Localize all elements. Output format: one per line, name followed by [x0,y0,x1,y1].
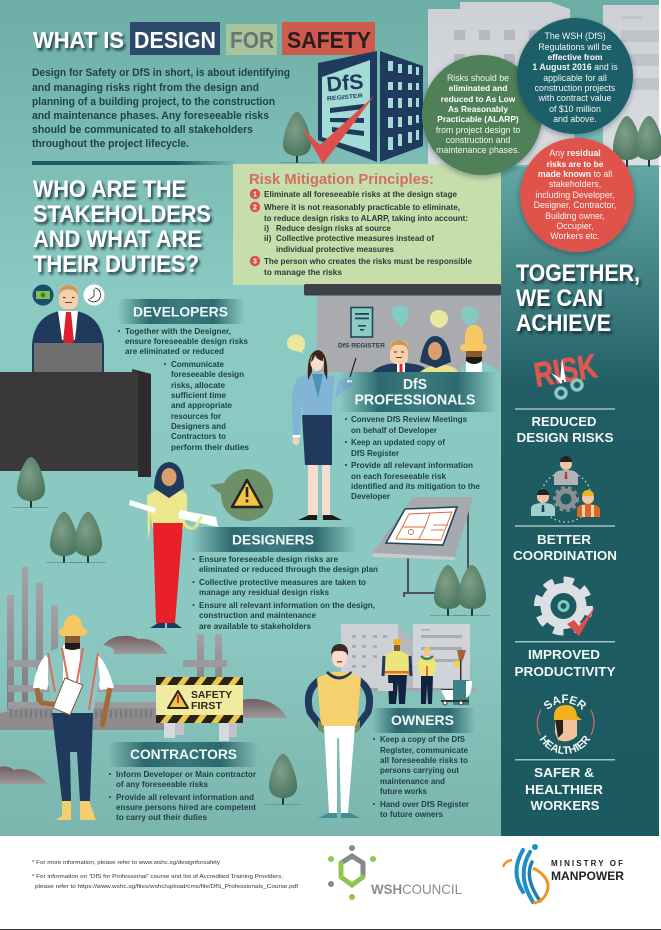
callout: teal circle: The WSH (DfS) [544,31,606,41]
text: contractor duties: Provide all relevant information and [116,792,254,802]
panel: risk mitigation principles: Reduce design risks at source [276,223,391,233]
text: designer duties: are available to stakeholders [199,621,311,631]
logo: Ministry of Manpower [503,844,624,903]
callout: green circle: maintenance phases. [436,145,520,155]
callout: green circle: As Reasonably [448,104,508,114]
heading: who are the stakeholders: STAKEHOLDERS [33,201,211,228]
footer notes: please refer to https://www.wshc.sg/files/wshc/upload/cms/file/DfS_Professionals_Course.pdf [35,884,298,890]
text: professional duties: Convene DfS Review Meetings [351,414,467,424]
cart [441,650,472,705]
text: developer duties: resources for [171,411,222,421]
trees top right [609,116,661,167]
label: improved productivity: PRODUCTIVITY [514,664,616,679]
callout: green circle: Risks should be [447,73,509,83]
text: owner duties: future works [380,786,427,796]
callout: red circle: Designer, Contractor, [534,200,616,210]
text: designer duties: Ensure foreseeable design risks are [199,554,338,564]
text: contractor duties: to carry out their duties [116,812,207,822]
icon: DfS register building: REGISTER [327,93,364,103]
speech bubble [287,334,305,353]
panel: risk mitigation principles [233,164,501,285]
intro paragraph: planning of a building project, to the construction [32,96,275,108]
label: safer healthier workers: HEALTHIER [525,782,604,797]
text: professional duties: Provide all relevant information [351,460,473,470]
label: better coordination: BETTER [537,532,592,547]
heading: dfs professionals [340,372,497,412]
column: together we can achieve [501,167,659,836]
label: better coordination [513,526,617,563]
text: developer duties [118,326,249,452]
icon: red check mark [302,96,374,164]
panel: designers [190,527,378,631]
panel: risk mitigation principles: ii) [264,233,272,243]
icon: register document [351,308,372,337]
callout: red circle: made known to all [538,169,612,179]
text: owner duties: to future owners [380,809,443,819]
intro paragraph: and managing risks right from the design and [32,82,259,94]
icon: warning bubble [210,469,273,521]
label: safer healthier workers: SAFER & [534,765,594,780]
text: developer duties: risks, allocate [171,380,225,390]
label: improved productivity [514,641,616,679]
rolled blueprints [129,500,218,528]
panel: dfs professionals [340,372,497,501]
callout: red circle: Any residual [549,148,601,158]
callout: green circle [422,55,542,175]
background: construction site pipes [0,567,287,784]
panel: owners [372,708,475,819]
callout: teal circle: with contract value [538,93,612,103]
text: professional duties: on each foreseeable risk [351,471,446,481]
logo: Ministry of Manpower: MINISTRY OF [551,859,623,868]
callout: green circle: Practicable (ALARP) [437,114,519,124]
icon: risk scissors: RISK [532,347,600,395]
title [33,22,375,55]
title: SAFETY [287,27,371,53]
text: developer duties: ensure foreseeable design risks [125,336,248,346]
text: owner duties: all foreseeable risks to [380,755,468,765]
label: safer healthier workers [515,759,615,813]
callout: teal circle: of $10 million [549,104,601,114]
text: owner duties: Keep a copy of the DfS [380,734,465,744]
logo: WSH Council [328,845,462,900]
callout: teal circle [517,18,633,134]
callout: teal circle: and above. [553,114,597,124]
toolbox [378,683,393,691]
intro paragraph: Design for Safety or DfS in short, is about identifying [32,67,290,79]
heading: together we can achieve: WE CAN [516,285,603,312]
illustration: developer at desk [0,285,151,477]
illustration: dfs professional woman [292,350,356,520]
heading: dfs professionals: DfS [403,376,427,393]
callout: teal circle: construction projects [535,83,616,93]
heading: owners: OWNERS [391,712,454,728]
callout: red circle [520,138,634,252]
label: reduced design risks: REDUCED [532,414,596,429]
text: professional duties: on behalf of Developer [351,425,438,435]
text: designer duties: construction and maintenance [199,610,316,620]
callout: green circle: eliminated and [449,83,507,93]
label: improved productivity: IMPROVED [528,647,600,662]
heading: designers: DESIGNERS [232,532,314,548]
text: contractor duties [109,769,257,822]
text: professional duties: identified and its mitigation to the [351,481,480,491]
background buildings top right [428,2,659,165]
icon: safer healthier badge: HEALTHIER [540,735,590,754]
title: WHAT IS [33,27,124,53]
callout: red circle: Workers etc. [550,231,600,241]
heading: who are the stakeholders: AND WHAT ARE [33,226,202,253]
title: FOR [230,27,274,53]
footer notes: * For information on “DfS for Professional” course and list of Accredited Training Providers, [32,874,283,880]
intro paragraph: throughout the project lifecycle. [32,138,189,150]
intro paragraph: should be communicated to all stakeholders [32,124,253,136]
text: professional duties: DfS Register [351,448,400,458]
icon: DfS register building [302,51,423,164]
panel: risk mitigation principles: The person who creates the risks must be responsible [264,256,472,266]
panel: risk mitigation principles: 1 [253,192,257,198]
panel: risk mitigation principles: 3 [253,258,257,266]
heading: contractors [108,742,258,767]
icon: safety first sign: FIRST [191,701,222,712]
text: owner duties: persons carrying out [380,765,459,775]
text: developer duties: foreseeable design [171,369,244,379]
illustration: register wall with people: DfS REGISTER [338,342,385,350]
workers [383,639,437,704]
panel: risk mitigation principles: to manage the risks [264,267,342,277]
text: professional duties [345,414,480,501]
icon: safety first sign [156,677,243,741]
panel: risk mitigation principles: individual protective measures [276,244,394,254]
heading: developers: DEVELOPERS [133,304,228,320]
heading: together we can achieve [516,260,640,337]
illustration: register wall with people [304,284,501,372]
panel: risk mitigation principles: i) [264,223,269,233]
callout: green circle: construction and [446,135,510,145]
panel: risk mitigation principles: Risk Mitigation Principles: [249,171,434,188]
callout: green circle: reduced to As Low [441,94,516,104]
callout: red circle: stakeholders, [549,179,601,189]
icon: clock [84,284,104,306]
text: owner duties [373,734,470,819]
panel: risk mitigation principles: to reduce design risks to ALARP, taking into account: [264,213,468,223]
text: designer duties [192,554,378,631]
heading: dfs professionals: PROFESSIONALS [354,392,476,408]
callout: red circle: Building owner, [545,211,605,221]
text: designer duties: Ensure all relevant information on the design, [199,600,375,610]
trees left [13,457,106,563]
panel: developers [0,284,249,477]
callout: teal circle: applicable for all [543,73,607,83]
callout: teal circle: effective from [548,52,602,62]
label: reduced design risks [515,408,615,445]
illustration: owner [308,644,370,818]
text: contractor duties: ensure persons hired are competent [116,802,256,812]
text: developer duties: Designers and [171,421,226,431]
text: professional duties: Developer [351,491,391,501]
text: contractor duties: Inform Developer or Main contractor [116,769,257,779]
text: developer duties: Communicate [171,359,224,369]
callout: red circle: risks are to be [547,159,604,169]
text: developer duties: and appropriate [171,400,232,410]
illustration: drafting table [372,497,473,597]
intro paragraph: and maintenance phases. Any foreseeable risks [32,110,269,122]
text: developer duties: sufficient time [171,390,226,400]
heading: contractors: CONTRACTORS [130,746,237,762]
text: developer duties: Contractors to [171,431,226,441]
text: designer duties: Collective protective measures are taken to [199,577,366,587]
trees right [430,565,490,616]
icon: safer healthier badge: SAFER [544,694,586,710]
illustration: maintenance workers and buildings [341,624,476,705]
callout: green circle: from project design to [436,125,520,135]
label: better coordination: COORDINATION [513,548,617,563]
illustration: contractor [33,615,114,820]
panel: risk mitigation principles: Collective protective measures instead of [276,233,434,243]
heading: who are the stakeholders: THEIR DUTIES? [33,251,199,278]
callout: red circle: Occupier, [556,221,594,231]
intro paragraph [32,67,290,150]
heading: together we can achieve: ACHIEVE [516,310,611,337]
panel: risk mitigation principles: Eliminate all foreseeable risks at the design stage [264,189,457,199]
text: designer duties: manage any residual design risks [199,587,329,597]
logo: WSH Council: WSHCOUNCIL [371,881,462,897]
panel: contractors [108,742,258,822]
label: safer healthier workers: WORKERS [530,798,600,813]
label: reduced design risks: DESIGN RISKS [516,430,614,445]
text: professional duties: Keep an updated copy of [351,437,445,447]
icon: money [32,284,54,306]
text: owner duties: Register, communicate [380,745,468,755]
text: owner duties: maintenance and [380,776,445,786]
text: owner duties: Hand over DfS Register [380,799,470,809]
text: contractor duties: of any foreseeable risks [116,779,208,789]
tree [279,112,315,163]
callout: red circle: including Developer, [535,190,615,200]
footer notes [32,860,298,890]
heading: designers [190,527,356,552]
text: developer duties: perform their duties [171,442,249,452]
callout: teal circle: 1 August 2016 and is [532,62,618,72]
text: developer duties: Together with the Designer, [125,326,231,336]
heading: together we can achieve: TOGETHER, [516,260,640,287]
icon: safety first sign: SAFETY [191,690,232,701]
title: DESIGN [134,27,216,53]
illustration: designer [129,462,218,628]
heading: who are the stakeholders: WHO ARE THE [33,176,186,203]
footer notes: * For more information, please refer to www.wshc.sg/designforsafety [32,860,220,866]
icon: safer healthier badge [536,694,595,754]
tree bottom [265,754,301,805]
text: developer duties: are eliminated or reduced [125,346,224,356]
heading: who are the stakeholders [33,176,211,278]
icon: coordination people [531,456,600,522]
text: designer duties: eliminated or reduced through the design plan [199,564,378,574]
callout: teal circle: Regulations will be [538,42,612,52]
icon: DfS register building: DfS [326,70,364,97]
panel: risk mitigation principles: Where it is not reasonably practicable to eliminate, [264,202,460,212]
icon: gear with check [538,580,596,636]
panel: risk mitigation principles: 2 [253,204,257,212]
logo: Ministry of Manpower: MANPOWER [551,869,624,883]
heading: developers [118,299,245,324]
